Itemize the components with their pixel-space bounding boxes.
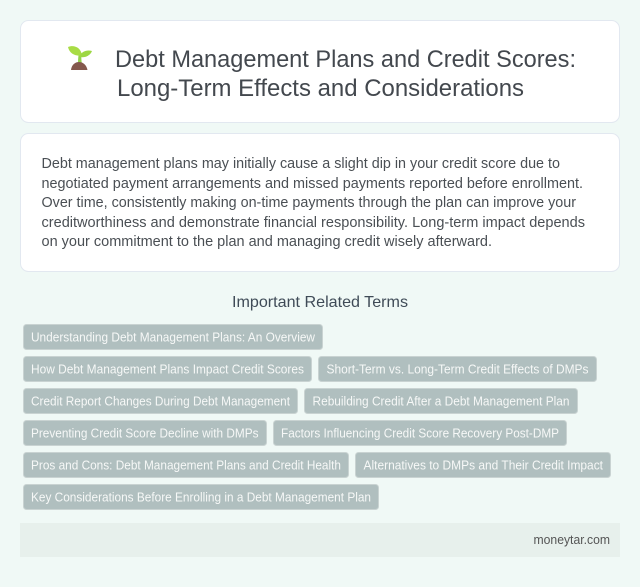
title: Long-Term Effects and Considerations [117,75,524,102]
summary paragraph: creditworthiness and demonstrate financial responsibility. Long-term impact depends [42,215,585,231]
footer [20,523,620,557]
tag: rebuilding [304,388,578,414]
summary paragraph: Debt management plans may initially cause a slight dip in your credit score due to [42,156,560,172]
tag list [24,324,610,510]
summary paragraph [42,156,585,250]
tag: pros and cons: Pros and Cons: Debt Management Plans and Credit Health [31,458,341,472]
tag: short vs long term: Short-Term vs. Long-Term Credit Effects of DMPs [326,362,589,376]
tag: recovery factors: Factors Influencing Credit Score Recovery Post-DMP [281,426,559,440]
tag: impact: How Debt Management Plans Impact Credit Scores [31,362,304,376]
panel: title card [20,20,620,122]
tag: key considerations: Key Considerations Before Enrolling in a Debt Management Plan [31,490,371,504]
tag: alternatives [356,452,610,478]
tag: short vs long term [318,356,596,382]
tag: credit report changes: Credit Report Changes During Debt Management [31,394,290,408]
tag: key considerations [24,484,378,510]
icon: sprout [68,46,92,70]
tag: pros and cons [24,452,348,478]
tag: preventing decline: Preventing Credit Score Decline with DMPs [31,426,259,440]
title: Debt Management Plans and Credit Scores: [115,46,576,73]
footer: moneytar.com [534,533,610,547]
panel: summary text card [20,134,620,272]
title [115,46,576,102]
summary paragraph: negotiated payment arrangements and missed payments reported before enrollment. [42,176,583,192]
tag: impact [24,356,312,382]
tag: alternatives: Alternatives to DMPs and Their Credit Impact [364,458,603,472]
heading: important related terms: Important Related Terms [232,294,408,311]
tag: understanding [24,324,322,350]
tag: preventing decline [24,420,266,446]
summary paragraph: on your commitment to the plan and managing credit wisely afterward. [42,234,492,250]
tag: recovery factors [274,420,566,446]
tag: credit report changes [24,388,298,414]
tag: understanding: Understanding Debt Management Plans: An Overview [31,330,316,344]
tag: rebuilding: Rebuilding Credit After a Debt Management Plan [312,394,570,408]
summary paragraph: Over time, consistently making on-time payments through the plan can improve your [42,195,576,211]
